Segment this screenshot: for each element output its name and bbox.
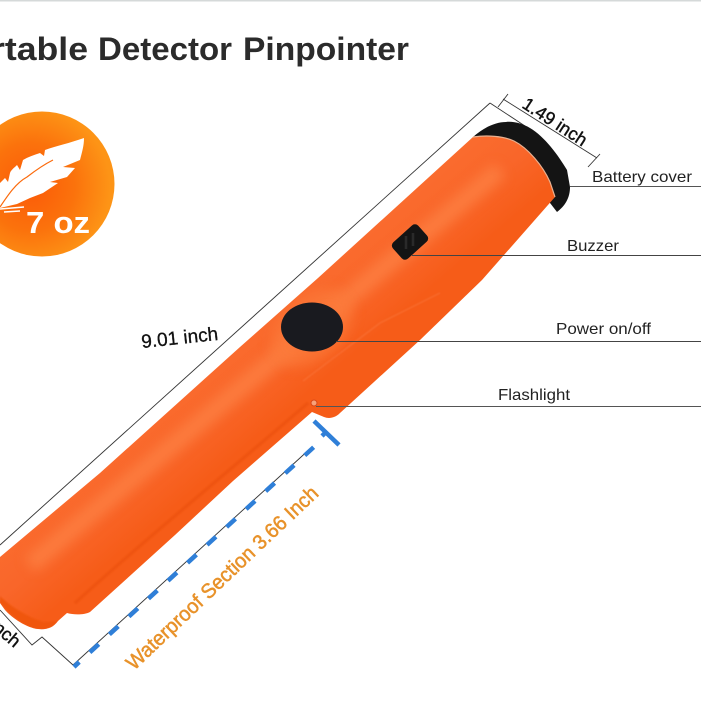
weight value: 7 oz — [26, 205, 90, 240]
dimension: tip width — [0, 610, 73, 665]
icon: feather — [0, 138, 84, 208]
title — [0, 31, 409, 67]
label: power on/off: Power on/off — [556, 321, 652, 338]
cap rim — [473, 136, 555, 197]
icon: flashlight lens — [311, 400, 317, 406]
label: battery cover — [570, 169, 701, 186]
title: Detector — [98, 31, 232, 67]
top divider — [0, 0, 701, 2]
body lower ridge — [303, 293, 440, 381]
weight badge — [0, 112, 114, 256]
title: Pinpointer — [243, 31, 409, 67]
icon: power button — [281, 302, 343, 352]
body highlight — [30, 170, 500, 565]
label: battery cover: Battery cover — [592, 169, 693, 186]
label: flashlight: Flashlight — [498, 387, 571, 404]
dimension: 1.49 inch width — [490, 94, 600, 167]
body tip shading — [0, 596, 58, 629]
dimension: 1.49 inch width: 1.49 inch — [519, 94, 591, 150]
button recess — [275, 292, 351, 366]
dimension: 9.01 inch length: 9.01 inch — [140, 324, 219, 353]
waterproof label: Waterproof Section 3.66 Inch — [122, 482, 323, 675]
pinpointer body — [0, 130, 560, 635]
battery cover cap — [473, 122, 570, 212]
label: buzzer: Buzzer — [567, 238, 620, 255]
icon: buzzer — [390, 222, 430, 262]
dimension: waterproof section — [73, 421, 339, 675]
